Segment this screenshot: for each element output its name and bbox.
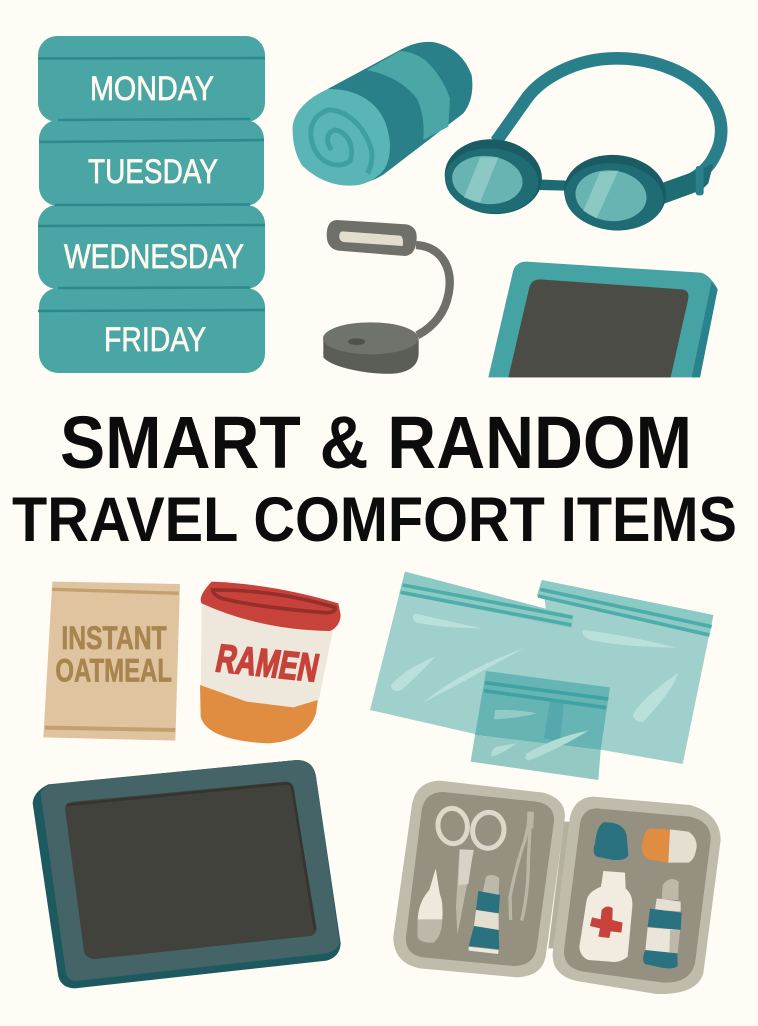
icon: rolled towel — [293, 42, 472, 186]
ramen label: RAMEN — [212, 637, 323, 690]
lamp base — [323, 338, 419, 374]
cup body — [201, 603, 334, 743]
orange capsule — [642, 828, 697, 863]
small ointment bottle — [417, 868, 443, 943]
goggle bridge — [538, 179, 567, 191]
teal cap — [594, 822, 628, 860]
left bag — [370, 572, 573, 747]
case: Friday — [38, 288, 265, 373]
case: Tuesday: TUESDAY — [88, 153, 218, 191]
icon: instant oatmeal packet: OATMEAL — [55, 651, 172, 688]
goggle strap — [496, 58, 721, 192]
cup lid — [201, 582, 341, 631]
icon: ramen cup — [200, 582, 341, 743]
icon: swim goggles — [442, 58, 721, 235]
icon: small tablet, cropped — [488, 262, 718, 377]
icon: instant oatmeal packet: INSTANT — [61, 619, 167, 656]
case: Monday — [38, 36, 265, 122]
pill organizer: stacked weekday cases — [38, 36, 265, 373]
case: Friday: FRIDAY — [104, 321, 206, 359]
case: Monday: MONDAY — [90, 70, 214, 108]
white bottle with red cross — [579, 871, 632, 962]
scissors — [436, 806, 506, 935]
icon: USB book lamp — [323, 220, 450, 374]
dropper bottle — [643, 879, 682, 968]
kit hinge — [548, 822, 572, 948]
small tube — [469, 875, 500, 954]
lamp head — [327, 220, 417, 256]
kit left panel — [393, 781, 565, 977]
kit right panel — [553, 797, 721, 994]
left lens — [442, 135, 545, 218]
icon: open first-aid travel kit — [393, 781, 721, 994]
icon: zip bags — [370, 572, 713, 780]
right lens — [561, 151, 669, 235]
title line 1: SMART & RANDOM — [60, 401, 692, 484]
icon: instant oatmeal packet — [43, 582, 180, 741]
icon: large tablet — [33, 760, 341, 988]
title — [12, 401, 737, 555]
lamp neck — [416, 245, 450, 335]
case: Wednesday — [38, 204, 265, 289]
case: Tuesday — [39, 119, 264, 206]
case: Wednesday: WEDNESDAY — [64, 238, 244, 276]
tablet screen — [65, 782, 317, 959]
tweezers — [510, 812, 531, 921]
small bag — [471, 671, 610, 780]
right bag — [537, 580, 713, 764]
